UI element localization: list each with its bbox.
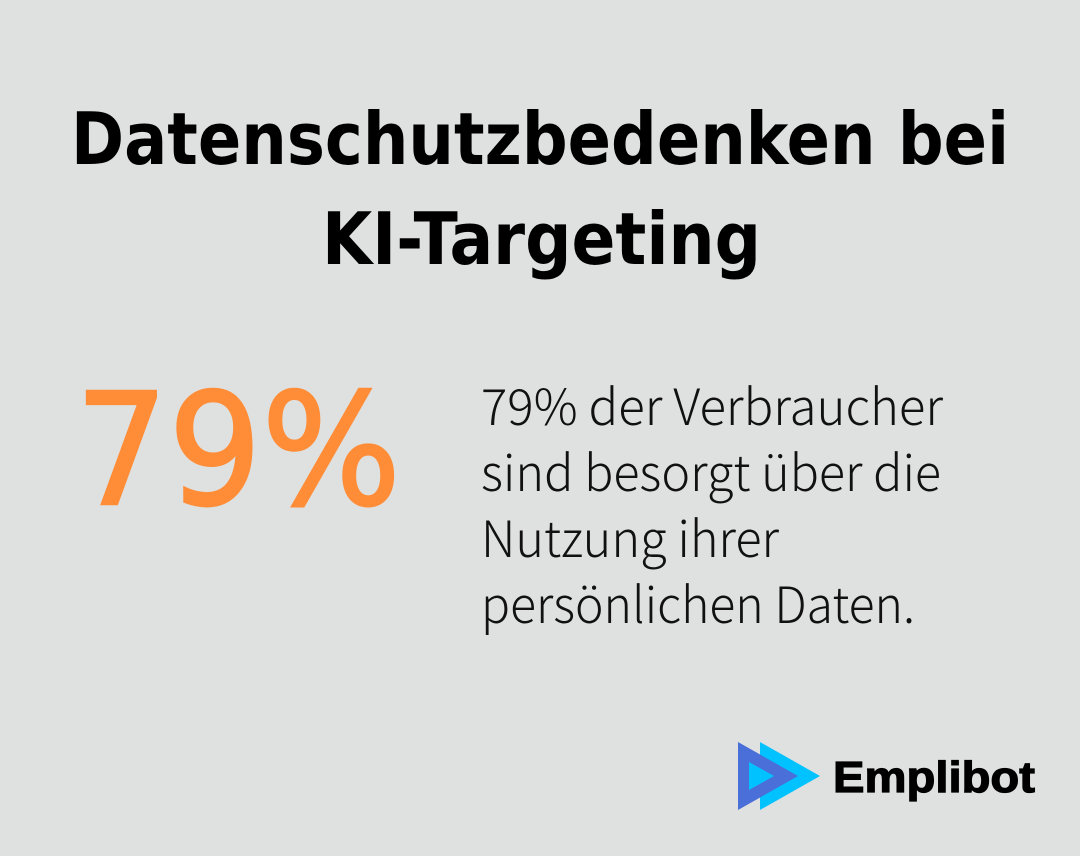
- icon: play triangles: [738, 742, 820, 810]
- logo: Emplibot: [738, 742, 1035, 810]
- big statistic: 79%: 79%: [75, 360, 401, 541]
- description text: 79% der Verbraucher: [481, 368, 944, 440]
- description text: Nutzung ihrer: [481, 500, 780, 572]
- description text: persönlichen Daten.: [481, 566, 915, 638]
- wordmark: Emplibot: [833, 753, 1035, 802]
- description text: sind besorgt über die: [481, 434, 941, 506]
- title: KI-Targeting: [322, 197, 761, 281]
- description text: [481, 368, 944, 638]
- title: [71, 97, 1009, 281]
